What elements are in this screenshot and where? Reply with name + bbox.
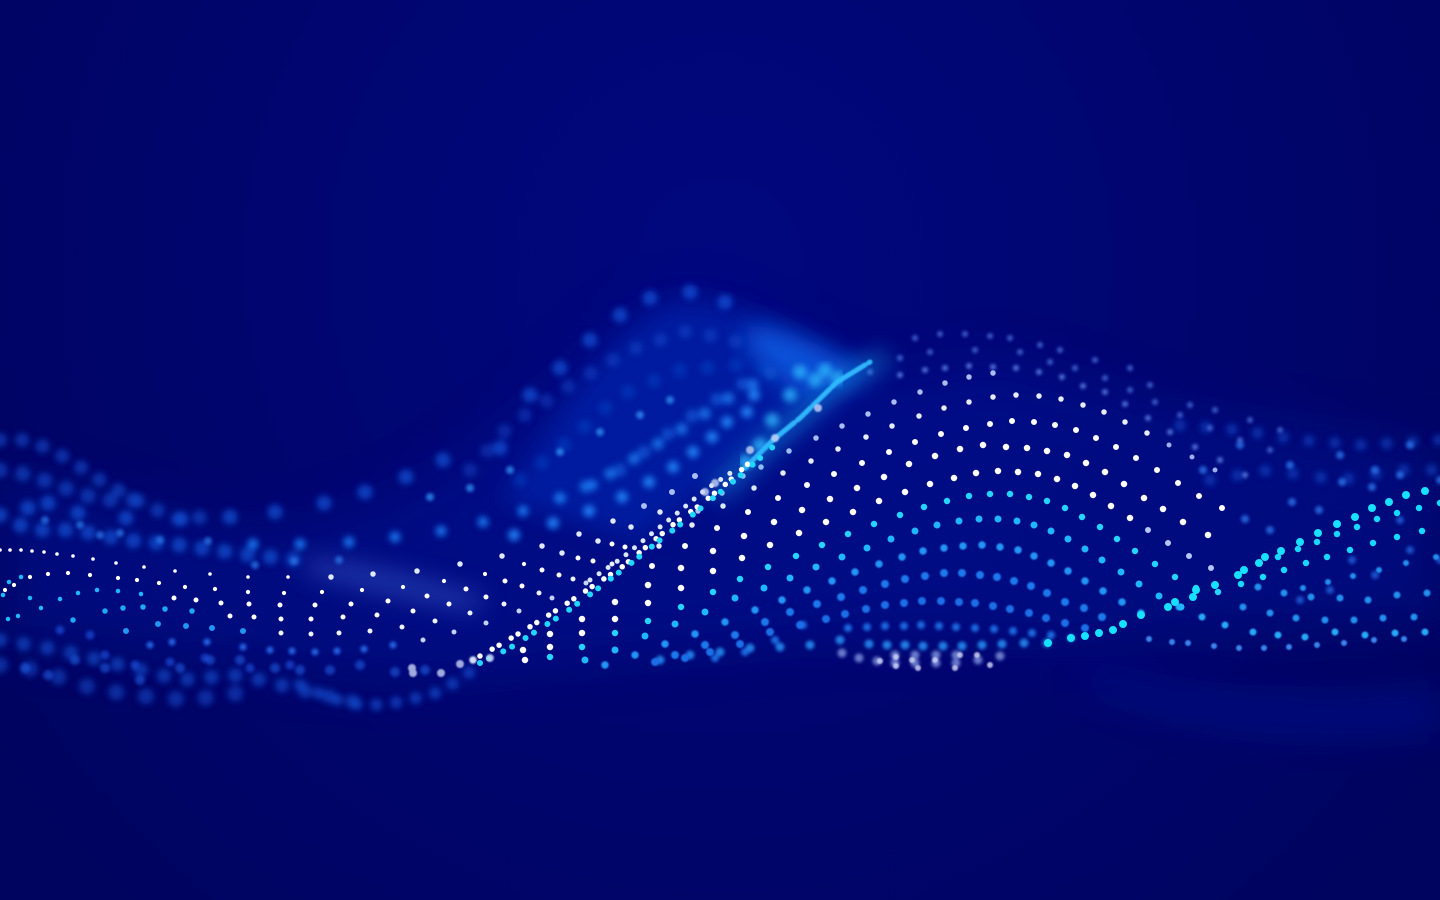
right hill: white rows <box>0 373 1241 660</box>
left wave: mid-focus rows <box>25 334 1440 680</box>
back surface: blurred rows of dots <box>0 292 1440 706</box>
cyan rows <box>3 491 1440 660</box>
mist: glow behind the wave <box>0 300 1440 735</box>
left wave: white rows <box>0 550 288 577</box>
glowing ridge line <box>412 360 880 673</box>
right hill: lower cyan and blue rows <box>605 545 1436 668</box>
right cyan ridge <box>1048 491 1425 643</box>
